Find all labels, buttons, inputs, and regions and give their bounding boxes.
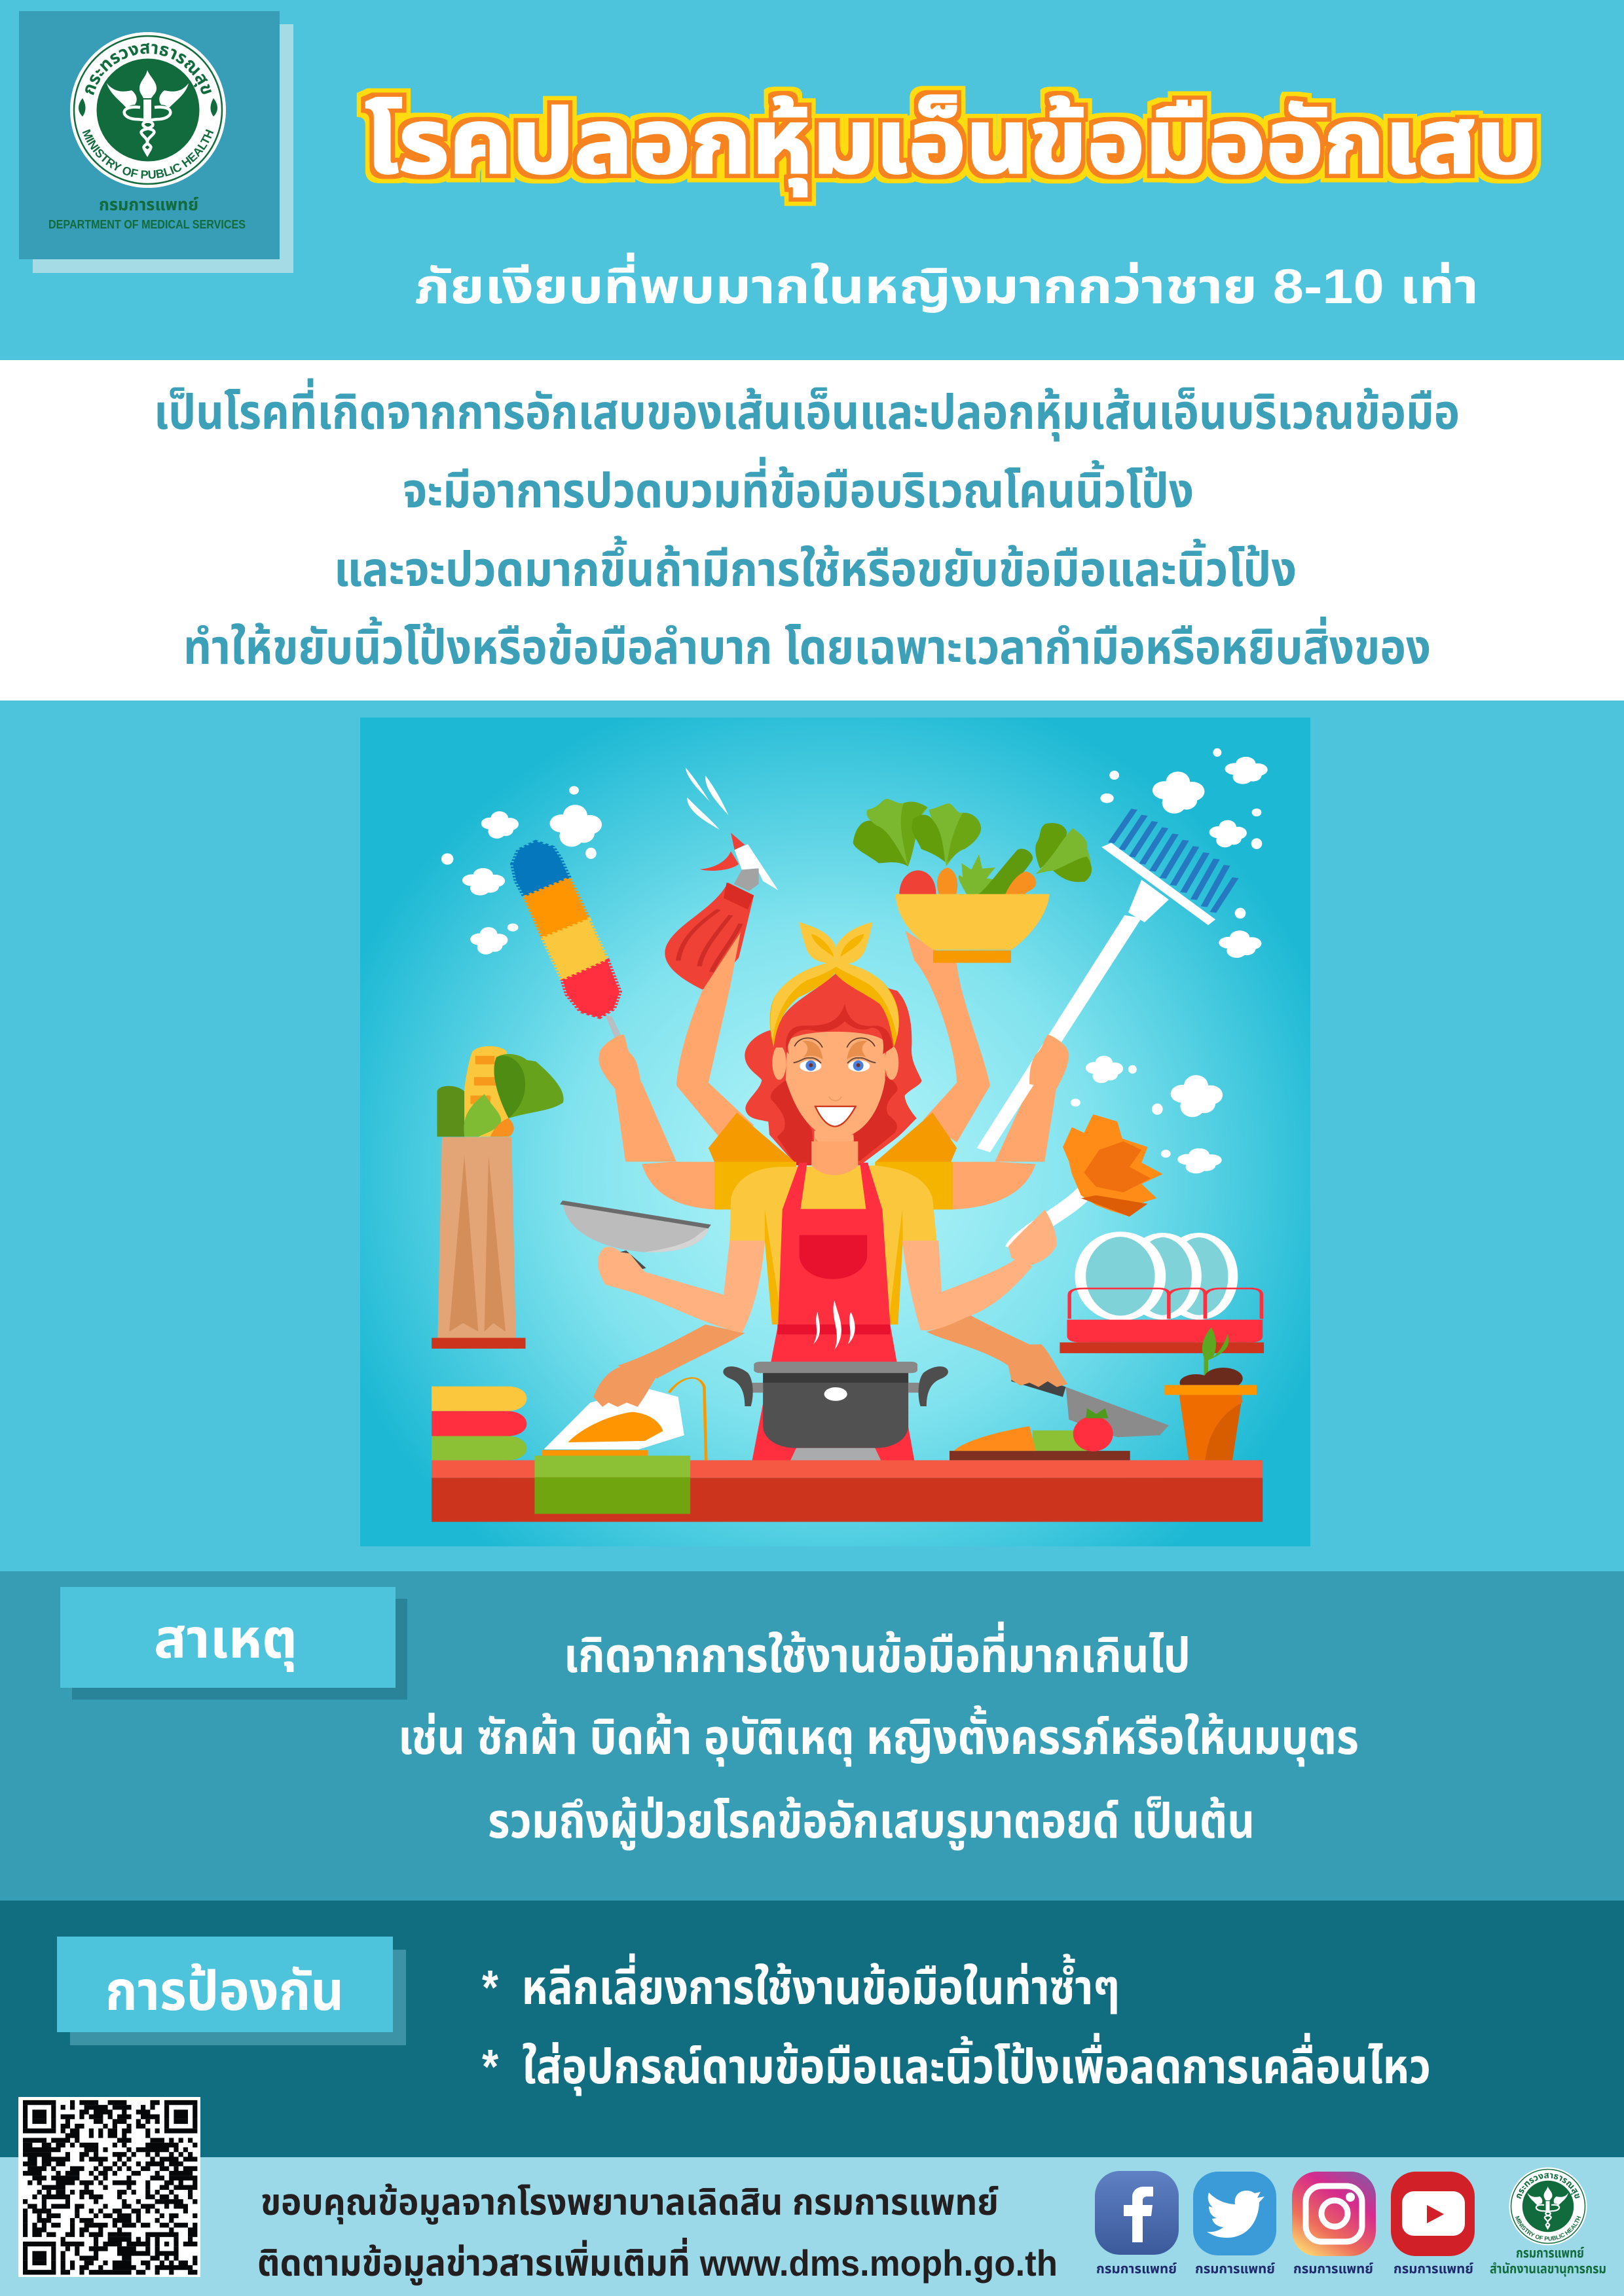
arm: middle left xyxy=(621,1241,765,1333)
causes text: รวมถึงผู้ป่วยโรคข้ออักเสบรูมาตอยด์ เป็นต้น xyxy=(488,1794,1255,1851)
hair shadow xyxy=(771,1076,897,1165)
illustration: multitasking woman xyxy=(360,718,1310,1546)
mop xyxy=(977,809,1236,1152)
neck xyxy=(814,1131,856,1165)
plates and rack xyxy=(1060,1234,1264,1353)
heading box: causes: สาเหตุ xyxy=(154,1608,297,1672)
hair xyxy=(745,974,921,1165)
logo box xyxy=(19,11,293,273)
social labels xyxy=(1096,2262,1473,2276)
causes text: เช่น ซักผ้า บิดผ้า อุบัติเหตุ หญิงตั้งครรภ์หรือให้นมบุตร xyxy=(398,1705,1359,1767)
pan xyxy=(561,1203,710,1269)
fringe xyxy=(775,974,894,1054)
upper illustration front layer xyxy=(437,1034,1069,1162)
head xyxy=(745,922,921,1165)
icon: instagram xyxy=(1292,2172,1376,2256)
icon: ministry emblem small xyxy=(1509,2167,1587,2246)
ears xyxy=(772,1046,898,1080)
emblem caption: สำนักงานเลขานุการกรม xyxy=(1490,2262,1606,2276)
icon: youtube xyxy=(1391,2172,1475,2256)
fringe shadow xyxy=(786,1004,893,1054)
prevention text: * ใส่อุปกรณ์ดามข้อมือและนิ้วโป้งเพื่อลดการเคลื่อนไหว xyxy=(482,2033,1431,2096)
mouth xyxy=(815,1106,856,1127)
arm: lower right xyxy=(927,1315,1054,1368)
social labels: กรมการแพทย์ xyxy=(1393,2262,1473,2276)
prevention text xyxy=(482,1954,1431,2096)
bow xyxy=(799,922,872,964)
apron xyxy=(752,1163,914,1461)
sleeves xyxy=(709,1112,795,1162)
brows and eyes xyxy=(794,1038,876,1072)
social labels: กรมการแพทย์ xyxy=(1096,2262,1177,2276)
emblem caption xyxy=(1490,2246,1606,2276)
arm: inner right xyxy=(905,931,990,1142)
neck and collar xyxy=(811,1141,858,1175)
hands upper xyxy=(599,1034,1069,1088)
potted plant xyxy=(1164,1327,1257,1460)
description text: เป็นโรคที่เกิดจากการอักเสบของเส้นเอ็นและปลอกหุ้มเส้นเอ็นบริเวณข้อมือ xyxy=(154,378,1460,442)
orange duster xyxy=(1005,1114,1163,1249)
folded towels xyxy=(432,1387,526,1460)
arm: middle right xyxy=(902,1241,1033,1330)
panel: prevention xyxy=(0,1901,1624,2157)
bagged groceries xyxy=(437,1046,564,1137)
heading box: causes xyxy=(60,1587,407,1700)
footer text: ขอบคุณข้อมูลจากโรงพยาบาลเลิดสิน กรมการแพทย์ xyxy=(261,2181,999,2225)
face xyxy=(786,1032,885,1139)
clouds and bubbles xyxy=(441,748,1268,1173)
emblem: ministry of public health: MINISTRY OF PUBLIC HEALTH xyxy=(83,129,213,179)
title: โรคปลอกหุ้มเอ็นข้อมืออักเสบ xyxy=(365,92,1538,196)
icon: facebook xyxy=(1095,2171,1179,2255)
nose xyxy=(829,1097,841,1101)
social labels: กรมการแพทย์ xyxy=(1293,2262,1373,2276)
arm: lower left xyxy=(618,1324,745,1379)
subtitle: ภัยเงียบที่พบมากในหญิงมากกว่าชาย 8-10 เท่า xyxy=(415,253,1479,314)
icon: ministry emblem small: MINISTRY OF PUBLIC HEALTH xyxy=(1515,2215,1581,2240)
logo caption xyxy=(48,194,246,231)
icon: ministry emblem small: กระทรวงสาธารณสุข xyxy=(1517,2173,1579,2199)
footer text xyxy=(257,2181,1058,2286)
feather duster xyxy=(513,841,646,1101)
emblem: ministry of public health: กระทรวงสาธารณสุข xyxy=(85,43,212,96)
lower illustration xyxy=(432,1114,1264,1522)
emblem: ministry of public health xyxy=(70,32,226,188)
social labels: กรมการแพทย์ xyxy=(1195,2262,1275,2276)
cutting board with vegetables and knife xyxy=(950,1344,1169,1460)
description text: ทำให้ขยับนิ้วโป้งหรือข้อมือลำบาก โดยเฉพาะเวลากำมือหรือหยิบสิ่งของ xyxy=(183,616,1431,674)
shirt xyxy=(729,1165,937,1324)
heading box: prevention: การป้องกัน xyxy=(105,1960,344,2022)
logo caption: DEPARTMENT OF MEDICAL SERVICES xyxy=(48,217,246,231)
heading box: prevention xyxy=(57,1937,406,2045)
spray bottle xyxy=(665,767,778,990)
QR code xyxy=(18,2097,200,2277)
panel: footer xyxy=(0,2157,1624,2296)
arm: inner left xyxy=(676,932,754,1142)
causes text: เกิดจากการใช้งานข้อมือที่มากเกินไป xyxy=(564,1622,1190,1683)
hand: middle right xyxy=(1008,1209,1057,1266)
upper illustration back layer xyxy=(441,748,1268,1173)
shoulders xyxy=(642,1162,1035,1209)
prevention text: * หลีกเลี่ยงการใช้งานข้อมือในท่าซ้ำๆ xyxy=(482,1954,1120,2014)
description text: จะมีอาการปวดบวมที่ข้อมือบริเวณโคนนิ้วโป้ง xyxy=(403,457,1194,518)
iron xyxy=(542,1364,706,1460)
panel: header xyxy=(19,11,1541,314)
cooking pot xyxy=(723,1362,948,1461)
icon: twitter xyxy=(1193,2172,1276,2255)
arm: outer right xyxy=(995,1083,1057,1161)
logo caption: กรมการแพทย์ xyxy=(99,194,198,214)
causes text xyxy=(398,1622,1359,1851)
headband xyxy=(770,961,899,1048)
description text: และจะปวดมากขึ้นถ้ามีการใช้หรือขยับข้อมือและนิ้วโป้ง xyxy=(334,536,1297,596)
description text xyxy=(154,378,1460,674)
neck shadow xyxy=(815,1138,854,1155)
vegetable bowl xyxy=(853,799,1092,963)
counter top xyxy=(432,1455,1263,1522)
panel: causes xyxy=(0,1571,1624,1901)
emblem caption: กรมการแพทย์ xyxy=(1516,2246,1584,2261)
panel: description xyxy=(0,360,1624,701)
grocery bag xyxy=(432,1137,526,1349)
hand: middle left xyxy=(598,1247,645,1290)
arm: outer left xyxy=(614,1083,676,1161)
footer text: ติดตามข้อมูลข่าวสารเพิ่มเติมที่ www.dms.moph.go.th xyxy=(257,2237,1058,2286)
